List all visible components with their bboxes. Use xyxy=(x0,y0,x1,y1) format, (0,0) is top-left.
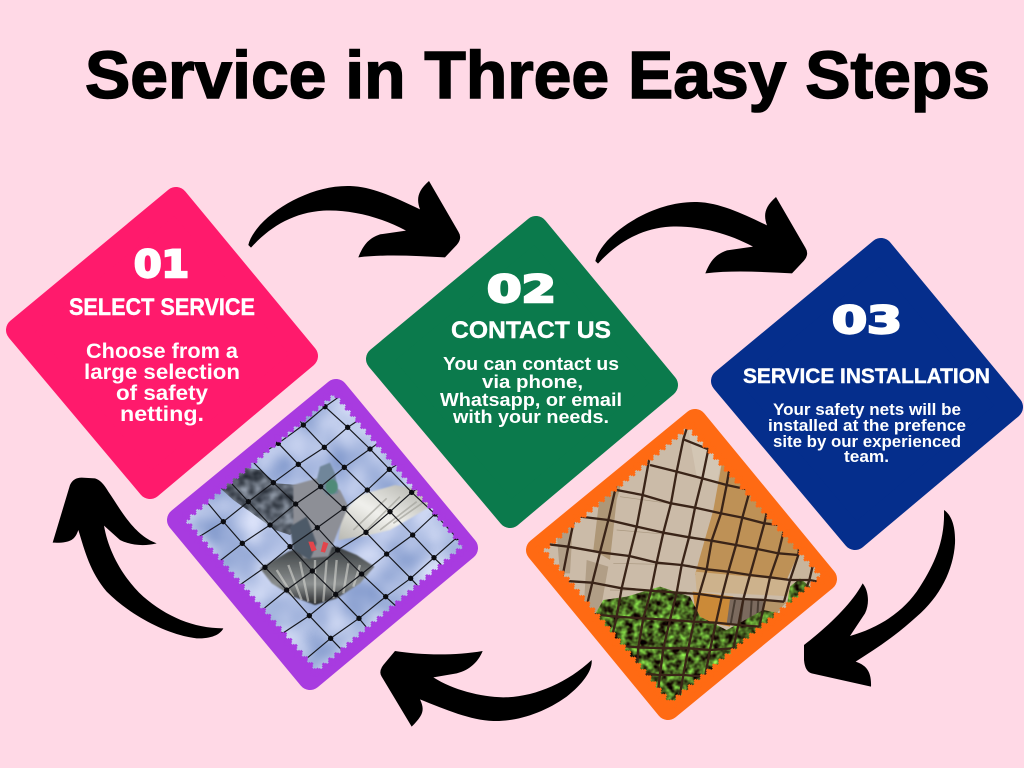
text block: step 02 description: Whatsapp, or email xyxy=(440,389,622,410)
text block: step 02 description xyxy=(440,353,622,427)
arrow: building photo to pigeon photo xyxy=(380,651,592,727)
title: Service in Three Easy Steps xyxy=(85,38,990,113)
heading: contact us: CONTACT US xyxy=(451,317,611,344)
text block: step 01 description: Choose from a xyxy=(86,340,238,363)
panel: step 02 contact us xyxy=(378,228,666,516)
panel: building and netting photo xyxy=(533,413,840,713)
arrow: step 02 to step 03 xyxy=(595,197,807,273)
step number 03: 03 xyxy=(832,299,902,342)
netting xyxy=(540,423,823,703)
icon: pigeon xyxy=(217,463,435,605)
panel: step 03 service installation xyxy=(723,250,1011,538)
arrow: pigeon photo to step 01 xyxy=(53,478,223,638)
netting xyxy=(200,398,460,659)
text block: step 03 description: site by our experienced xyxy=(773,433,961,451)
arrow: step 03 to building photo xyxy=(804,510,955,687)
text block: step 03 description: Your safety nets will be xyxy=(773,401,961,419)
bushes xyxy=(592,578,810,708)
text block: step 02 description: with your needs. xyxy=(452,406,609,427)
heading: select service: SELECT SERVICE xyxy=(69,294,255,321)
text block: step 01 description xyxy=(84,340,240,426)
panel: pigeon and netting photo xyxy=(173,383,480,683)
step number 01: 01 xyxy=(134,243,189,286)
text block: step 02 description: via phone, xyxy=(482,371,583,392)
text block: step 01 description: of safety xyxy=(116,382,208,405)
step number 02: 02 xyxy=(487,268,556,311)
net knots xyxy=(220,404,458,641)
text block: step 01 description: large selection xyxy=(84,361,240,384)
text block: step 01 description: netting. xyxy=(120,403,204,426)
heading: service installation: SERVICE INSTALLATION xyxy=(743,365,990,388)
text block: step 03 description: team. xyxy=(844,448,889,466)
arrow: step 01 to step 02 xyxy=(248,181,460,257)
text block: step 03 description xyxy=(768,401,966,466)
text block: step 02 description: You can contact us xyxy=(443,353,619,374)
panel: step 01 select service xyxy=(18,199,306,487)
text block: step 03 description: installed at the prefence xyxy=(768,417,966,435)
